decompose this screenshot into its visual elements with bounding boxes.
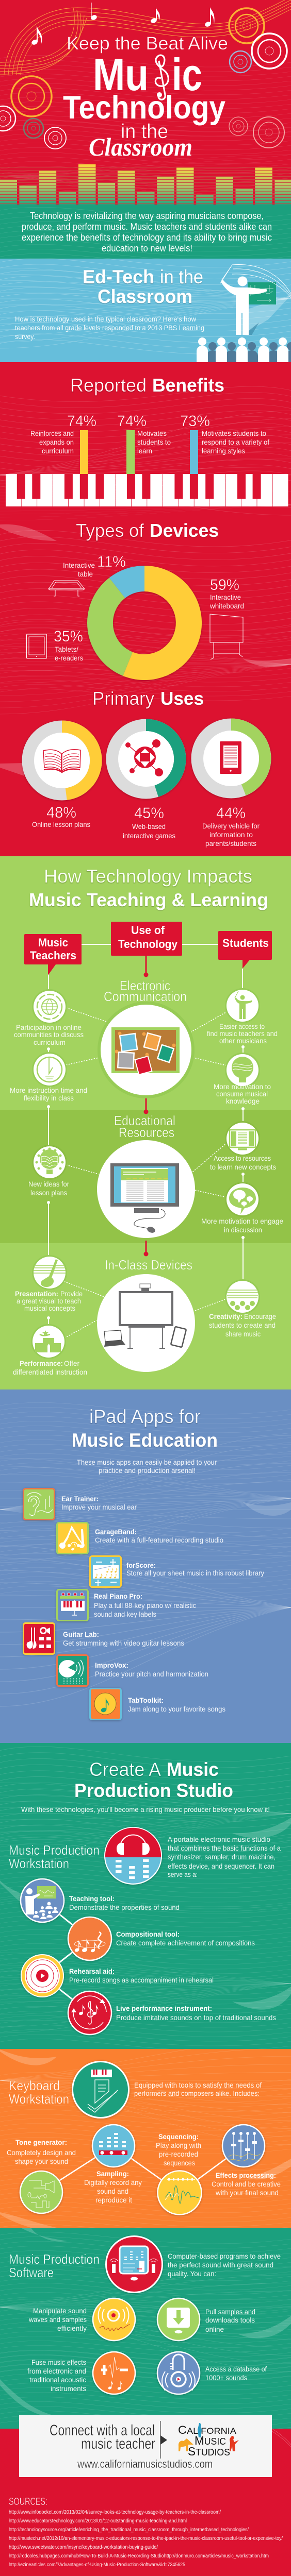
panel: footer [0, 2415, 291, 2576]
item: teaching tool: Teaching tool: [69, 1894, 115, 1903]
item: manipulate sound: waves and samples [28, 2315, 87, 2324]
item: teaching tool [21, 1879, 180, 1922]
app: forscore: forScore: [126, 1561, 156, 1569]
heading: types of devices: Devices [150, 520, 219, 541]
text: access to resources: Access to resources [214, 1154, 271, 1162]
heading: in the [160, 266, 203, 287]
label: interactive table [48, 553, 126, 596]
app: improvox: ImproVox: [95, 1661, 128, 1669]
benefit: curriculum: curriculum [42, 447, 74, 455]
heading: reported benefits: Benefits [152, 375, 224, 396]
title: in the [121, 121, 168, 143]
label: use of technology: Technology [118, 938, 178, 951]
chart: delivery vehicle [191, 718, 271, 799]
panel: header [0, 0, 291, 211]
text: instruction time: More instruction time and [10, 1086, 87, 1094]
item: effects processing: Effects processing: [216, 2171, 276, 2179]
icon: tablet [220, 741, 241, 774]
label: students: Students [222, 937, 269, 950]
label: tablets [27, 628, 83, 662]
item: effects processing [212, 2125, 281, 2197]
benefit: curriculum: expands on [39, 438, 74, 446]
item: effects processing: with your final sound [215, 2189, 279, 2197]
heading: educational resources: Resources [119, 1125, 174, 1140]
heading: primary uses [92, 688, 204, 709]
benefit: motivates: 74% [117, 413, 147, 430]
app: guitar lab [24, 1623, 184, 1654]
item: compositional tool: Create complete achievement of compositions [116, 1939, 255, 1947]
text: instruction time: flexibility in class [24, 1094, 74, 1102]
icon: headphones [104, 1827, 162, 1885]
heading: electronic communication [104, 978, 187, 1004]
icon: monitor document [225, 1121, 260, 1156]
text block: software [168, 2252, 281, 2278]
sources: SOURCES: [9, 2496, 47, 2507]
label: interactive table: 11% [97, 553, 126, 570]
item: compositional tool: Compositional tool: [116, 1930, 180, 1938]
item: tone generator: shape your sound [15, 2157, 68, 2165]
panel: how technology impacts teaching [0, 856, 291, 1389]
heading: educational resources: Educational [114, 1113, 175, 1128]
heading: Music Teaching & Learning [29, 889, 268, 910]
item: rehearsal aid: Pre-record songs as accompaniment in rehearsal [69, 1976, 214, 1984]
text block: survey. [15, 333, 35, 341]
text: creativity: Encourage [244, 1312, 276, 1320]
heading: Music Education [72, 1430, 218, 1451]
text block [77, 1458, 217, 1475]
text: performance: Performance: [20, 1359, 63, 1367]
sources: http://www.educatorstechnology.com/2013/01/12-outstanding-music-teaching-and.html [9, 2518, 187, 2524]
item: tone generator: Tone generator: [15, 2138, 67, 2146]
label: interactive whiteboard: whiteboard [209, 602, 244, 610]
heading: Music [167, 1759, 219, 1780]
item: sequencing [156, 2132, 201, 2214]
app: ear trainer: Improve your musical ear [61, 1503, 137, 1511]
text: new ideas: New ideas for [28, 1180, 69, 1188]
heading: primary uses: Primary [92, 688, 154, 709]
benefit: motivates: students to [137, 438, 171, 446]
app: guitar lab: Get strumming with video guitar lessons [63, 1639, 184, 1647]
item: database: 1000+ sounds [205, 2374, 247, 2382]
label: web-based games: 45% [134, 805, 164, 822]
text block: workstation: A portable electronic music studio [168, 1835, 270, 1843]
label: Music Production [9, 2251, 100, 2267]
text: more motivation: More motivation to [214, 1083, 271, 1091]
text: online communities [14, 1024, 84, 1046]
heading [83, 266, 203, 307]
item: live performance instrument: Produce imitative sounds on top of traditional sounds [116, 2013, 276, 2022]
icon: conductor small [225, 988, 260, 1023]
icon: game [125, 739, 163, 776]
app: tabtoolkit: TabToolkit: [128, 1696, 164, 1704]
text: easier access: find music teachers and [207, 1030, 278, 1038]
panel: music production software [0, 2228, 291, 2432]
call to action box [19, 2415, 272, 2477]
title: Technology [63, 90, 225, 126]
text: engage in discussion: More motivation to engage [201, 1217, 283, 1225]
text block: teachers from all grade levels responded to a 2013 PBS Learning [15, 324, 204, 332]
benefit: curriculum: 74% [67, 413, 96, 430]
item: tone generator: Completely design and [7, 2148, 76, 2157]
text: presentation: Presentation: [15, 1290, 58, 1298]
intro text [22, 211, 272, 253]
icon: music notes [31, 3, 215, 46]
intro text: education to new levels! [102, 243, 192, 253]
label: music teachers: Teachers [30, 949, 76, 962]
piano keyboard [6, 474, 288, 506]
icon: keyboard document [72, 2062, 129, 2117]
label [9, 2078, 69, 2107]
text: engage in discussion [201, 1217, 283, 1234]
item: database [157, 2352, 267, 2394]
icon: concentric circles [0, 8, 287, 149]
text block: software: Computer-based programs to achieve [168, 2252, 281, 2260]
text: online communities: curriculum [34, 1039, 66, 1046]
label: music production workstation [9, 1842, 100, 1871]
label: tablets: 35% [54, 628, 83, 645]
sources: http://www.sweetwater.com/insync/keyboard-workstation-buying-guide/ [9, 2545, 158, 2550]
text: more motivation: consume musical [216, 1090, 268, 1098]
heading: How Technology Impacts [44, 866, 252, 887]
heading [72, 1406, 218, 1451]
label: delivery vehicle: Delivery vehicle for [202, 822, 260, 830]
heading: types of devices: Types of [76, 520, 144, 541]
item: database: Access a database of [205, 2365, 267, 2373]
text: access to resources [210, 1154, 276, 1171]
sources: http://rodcoles.hubpages.com/hub/How-To-Build-A-Music-Recording-Studiohttp://donmuro.com/articles/music_workstation.htm [9, 2553, 269, 2559]
text: creativity: Creativity: [209, 1312, 242, 1320]
call to action box: www.californiamusicstudios.com [77, 2458, 213, 2470]
app: garageband: Create with a full-featured recording studio [95, 1536, 223, 1544]
benefit: curriculum [30, 413, 96, 474]
text: more motivation: knowledge [226, 1097, 260, 1105]
text: more motivation [214, 1083, 271, 1105]
text: creativity: share music [225, 1330, 261, 1338]
text: new ideas [28, 1180, 69, 1197]
icon: speech bubbles [225, 1182, 260, 1217]
panel: introduction [0, 205, 291, 289]
item: fuse music effects: traditional acoustic [29, 2376, 86, 2384]
heading: types of devices [76, 520, 219, 541]
chart: web-based games [106, 719, 186, 799]
icon: creativity crowd [225, 1279, 260, 1314]
item: sampling: sound and [97, 2187, 128, 2195]
app: garageband: GarageBand: [95, 1528, 137, 1536]
text block: workstation: serve as a: [168, 1870, 198, 1878]
title: Mu [93, 49, 149, 100]
connector lines [41, 2146, 244, 2193]
sources: http://www.infodocket.com/2013/02/04/survey-looks-at-technology-usage-by-teachers-in-the-classroom/ [9, 2510, 221, 2515]
connector lines [42, 1901, 90, 2013]
item: live performance instrument [68, 1991, 276, 2035]
icon: globe community [32, 989, 67, 1024]
heading: reported benefits [70, 375, 224, 396]
title: Keep the Beat Alive [67, 33, 228, 54]
app: improvox [57, 1655, 208, 1686]
item: manipulate sound [28, 2298, 135, 2341]
label: web-based games [123, 805, 175, 840]
item: effects processing: Control and be creative [212, 2180, 281, 2188]
label: interactive whiteboard: Interactive [210, 593, 241, 601]
subheading text: With these technologies, you'll become a rising music producer before you know it! [21, 1805, 270, 1814]
donut chart [87, 566, 202, 680]
call to action box: Connect with a local [50, 2422, 155, 2439]
label: delivery vehicle: 44% [216, 805, 246, 822]
label: use of technology [111, 922, 182, 956]
text: new ideas: lesson plans [30, 1189, 67, 1197]
icon: computer monitor [97, 1140, 195, 1238]
item: manipulate sound: efficiently [57, 2324, 87, 2332]
label: tablets: e-readers [55, 654, 83, 662]
benefit: learning styles [180, 413, 269, 474]
text block: How is technology used in the typical classroom? Here's how [15, 315, 196, 323]
item: pull samples: downloads tools [205, 2316, 255, 2324]
text block: These music apps can easily be applied to your [77, 1458, 217, 1466]
item: sampling: Sampling: [96, 2170, 129, 2178]
icon: book idea [32, 1145, 67, 1180]
benefit: curriculum: Reinforces and [30, 429, 74, 437]
app: garageband [57, 1523, 223, 1554]
app: ear trainer: Ear Trainer: [61, 1495, 99, 1503]
icon: audience [197, 337, 291, 362]
heading: Classroom [98, 286, 192, 307]
app: tabtoolkit: Jam along to your favorite songs [128, 1705, 225, 1713]
heading: Ed-Tech [83, 266, 154, 287]
icon: bulletin board [98, 1002, 195, 1098]
item: sequencing: pre-recorded [159, 2150, 198, 2158]
label: delivery vehicle [202, 805, 260, 848]
text block: practice and production arsenal! [99, 1466, 196, 1475]
text block [15, 315, 204, 341]
label: Workstation [9, 2091, 69, 2107]
label: delivery vehicle: parents/students [205, 839, 256, 848]
text: engage in discussion: in discussion [224, 1226, 262, 1234]
panel: ipad apps [0, 1389, 291, 1743]
item: sequencing: sequences [164, 2159, 195, 2167]
heading: in-class devices: In-Class Devices [105, 1257, 192, 1273]
sources [9, 2496, 283, 2568]
item: sampling [84, 2125, 142, 2204]
label: online lesson plans [32, 804, 90, 828]
label: students [218, 931, 272, 969]
app: forscore [90, 1556, 264, 1587]
item: rehearsal aid: Rehearsal aid: [69, 1967, 115, 1975]
text block: keyboard [134, 2081, 262, 2097]
item: pull samples: online [205, 2325, 224, 2333]
label: web-based games: Web-based [132, 822, 166, 831]
label: tablets: Tablets/ [55, 645, 78, 653]
app: real piano pro: Real Piano Pro: [94, 1592, 142, 1600]
app: forscore: Store all your sheet music in this robust library [126, 1569, 264, 1577]
orange music staff [0, 0, 291, 75]
app: improvox: Practice your pitch and harmonization [95, 1670, 208, 1678]
panel: keyboard workstation [0, 2040, 291, 2236]
text: online communities: communities to discuss [14, 1031, 84, 1039]
item: fuse music effects [27, 2352, 135, 2394]
heading: educational resources [114, 1113, 175, 1140]
heading: Production Studio [74, 1780, 233, 1801]
sources: http://ezinearticles.com/?Advantages-of-Using-Music-Production-Software&id=7345625 [9, 2562, 185, 2568]
item: fuse music effects: instruments [51, 2384, 86, 2393]
panel: red statistics section [0, 362, 291, 856]
call to action box: music teacher [81, 2435, 155, 2452]
icon: conductor [220, 264, 291, 335]
label: music teachers [24, 934, 82, 975]
app: guitar lab: Guitar Lab: [63, 1630, 99, 1638]
item: sampling: Digitally record any [84, 2178, 142, 2187]
item: pull samples: Pull samples and [205, 2308, 255, 2316]
text: performance: Offer [64, 1359, 79, 1367]
text: presentation: Provide [60, 1290, 83, 1298]
app: ear trainer [24, 1489, 137, 1520]
label: online lesson plans: Online lesson plans [32, 820, 90, 828]
arrow: red connector 1 [143, 956, 149, 977]
heading [74, 1759, 233, 1801]
item: pull samples [157, 2298, 255, 2341]
item: rehearsal aid [21, 1954, 214, 1997]
item: sequencing: Play along with [156, 2141, 201, 2149]
item: fuse music effects: from electronic and [27, 2367, 86, 2375]
text: presentation [15, 1290, 83, 1312]
heading: Create A [89, 1759, 161, 1780]
text block: keyboard: performers and composers alike. Includes: [134, 2089, 260, 2097]
benefit: motivates [117, 413, 171, 474]
logo: california music studios: STUDIOS [188, 2445, 230, 2458]
text: performance: differentiated instruction [13, 1368, 87, 1376]
label: Software [9, 2265, 54, 2280]
heading: electronic communication: Electronic [120, 978, 170, 993]
item: teaching tool: Demonstrate the properties of sound [69, 1903, 180, 1911]
text block: workstation: that combines the basic functions of a [168, 1844, 281, 1852]
icon: clock [32, 1052, 67, 1087]
label [9, 2251, 100, 2280]
item: sequencing: Sequencing: [158, 2132, 199, 2141]
item: fuse music effects: Fuse music effects [31, 2358, 86, 2366]
benefit: learning styles: 73% [180, 413, 210, 430]
benefit: learning styles: learning styles [202, 447, 245, 455]
label: interactive whiteboard: 59% [210, 577, 239, 594]
text block: workstation: effects device, and sequencer. It can [168, 1862, 274, 1870]
intro text: Technology is revitalizing the way aspiring musicians compose, [30, 211, 264, 221]
text block: software: the perfect sound with great sound [168, 2261, 273, 2269]
icon: software monitor [106, 2236, 162, 2293]
app: tabtoolkit [90, 1689, 225, 1720]
text: access to resources: to learn new concepts [210, 1163, 276, 1171]
item: compositional tool [68, 1917, 255, 1960]
item: tone generator [7, 2138, 76, 2213]
text: instruction time [10, 1086, 87, 1102]
logo: california music studios: MUSIC [195, 2434, 226, 2447]
label: interactive table: table [78, 570, 93, 578]
title: ic [172, 49, 202, 100]
heading [29, 866, 268, 910]
panel: create a music production studio [0, 1743, 291, 2050]
text: easier access: other musicians [219, 1037, 267, 1045]
title: Classroom [89, 132, 192, 161]
icon: guitar [32, 1255, 67, 1290]
title [63, 33, 228, 161]
text: easier access: Easier access to [219, 1023, 265, 1030]
heading: iPad Apps for [89, 1406, 201, 1427]
heading: reported benefits: Reported [70, 375, 147, 396]
sources: http://technologysource.org/article/enriching_the_traditional_music_classroom_through_internetbased_technologies/ [9, 2527, 249, 2533]
intro text: experience the benefits of technology and its ability to bring music [22, 232, 272, 243]
heading: electronic communication: Communication [104, 989, 187, 1004]
text: easier access [207, 1023, 278, 1045]
label: music teachers: Music [38, 936, 68, 949]
item: sampling: reproduce it [95, 2196, 132, 2204]
label: Keyboard [9, 2078, 60, 2093]
heading: primary uses: Uses [160, 688, 204, 709]
text block: workstation: synthesizer, sampler, drum machine, [168, 1853, 276, 1861]
text: online communities: Participation in online [16, 1024, 82, 1031]
text: creativity [209, 1312, 276, 1338]
label: interactive table: Interactive [63, 561, 95, 569]
app: real piano pro [57, 1590, 196, 1621]
text block: keyboard: Equipped with tools to satisfy the needs of [134, 2081, 262, 2089]
label: music production workstation: Music Production [9, 1842, 100, 1858]
benefit: motivates: Motivates [137, 429, 167, 437]
benefit: learning styles: Motivates students to [202, 429, 266, 437]
text: presentation: musical concepts [24, 1304, 75, 1312]
label: web-based games: interactive games [123, 832, 175, 840]
app: real piano pro: Play a full 88-key piano w/ realistic [94, 1601, 196, 1609]
logo: california music studios: CALIFORNIA [178, 2424, 237, 2436]
item: manipulate sound: Manipulate sound [33, 2307, 87, 2315]
text block: software: quality. You can: [168, 2269, 216, 2278]
arrow: red connector 3 [143, 1241, 149, 1256]
icon: podium [31, 1324, 66, 1359]
benefit: motivates: learn [137, 447, 152, 455]
logo: california music studios [178, 2423, 239, 2458]
text: performance [13, 1359, 87, 1376]
icon: lightbulb with staff [225, 1053, 260, 1088]
arrow: red connector 2 [143, 1098, 149, 1114]
text: creativity: students to create and [209, 1321, 276, 1329]
panel: ed-tech in the classroom [0, 252, 291, 362]
label: music production workstation: Workstation [9, 1856, 69, 1871]
benefit: learning styles: respond to a variety of [202, 438, 269, 446]
connector lines [47, 944, 245, 1338]
text block: workstation [168, 1835, 281, 1878]
label: online lesson plans: 48% [46, 804, 76, 821]
chart: online lesson plans [22, 720, 102, 801]
label: interactive whiteboard [209, 577, 244, 659]
equalizer bars [0, 164, 291, 205]
icon: book [43, 750, 80, 772]
item: live performance instrument: Live performance instrument: [116, 2004, 212, 2012]
label: use of technology: Use of [131, 924, 165, 937]
app: real piano pro: sound and key labels [94, 1610, 156, 1618]
icon: in-class devices [97, 1274, 195, 1372]
label: delivery vehicle: information to [209, 831, 253, 839]
text: presentation: a great visual to teach [17, 1297, 81, 1305]
